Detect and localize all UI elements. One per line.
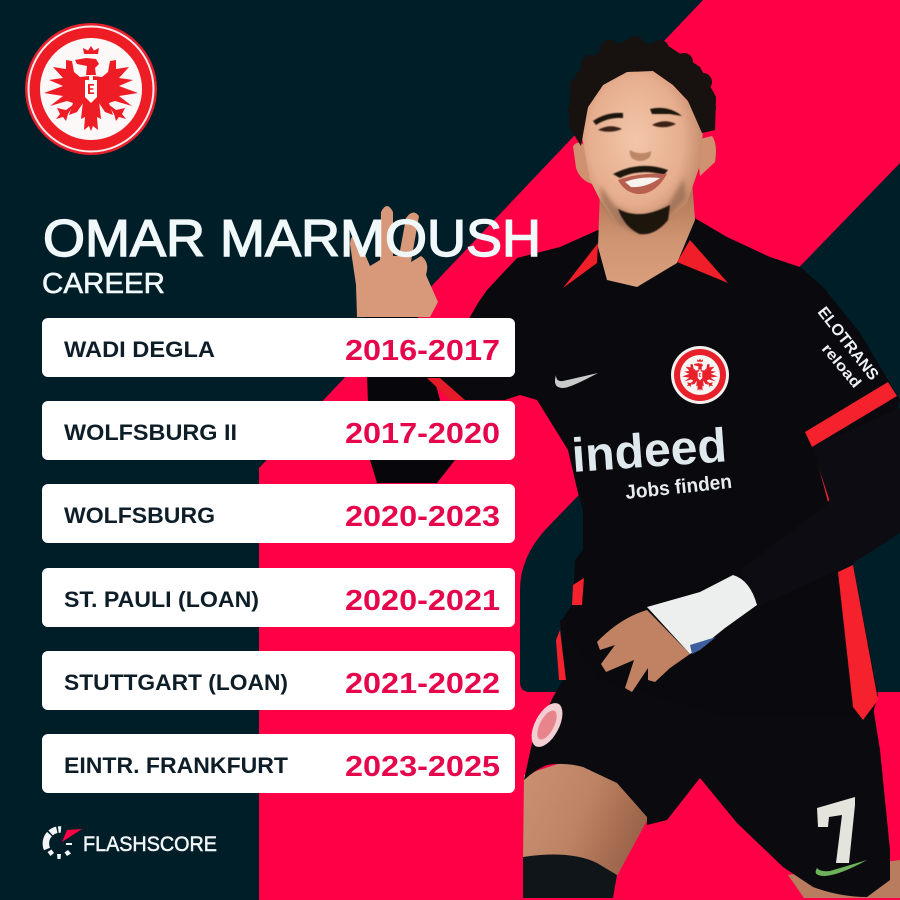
title: OMAR MARMOUSH <box>43 210 541 268</box>
career row: Eintr. Frankfurt <box>42 734 515 793</box>
career row: St. Pauli (loan): ST. PAULI (LOAN) <box>64 587 259 612</box>
shorts crest <box>525 698 569 752</box>
neck <box>598 180 695 287</box>
mouth <box>618 174 667 194</box>
career row: Wadi Degla: WADI DEGLA <box>64 337 215 362</box>
raised hand <box>350 206 438 317</box>
icon: Eintracht Frankfurt crest <box>25 23 157 155</box>
raised forearm sleeve <box>365 317 455 483</box>
teeth <box>625 178 660 187</box>
sleeve sponsor text: reload <box>818 341 864 391</box>
career row: Eintr. Frankfurt: EINTR. FRANKFURT <box>64 753 288 778</box>
sponsor text indeed: indeed <box>570 419 728 483</box>
goatee and moustache <box>613 166 670 234</box>
subtitle: CAREER <box>42 268 165 300</box>
player photo illustration <box>350 36 900 898</box>
hair <box>568 36 716 146</box>
career row: Stuttgart (loan): 2021-2022 <box>345 668 500 700</box>
collar trim <box>563 240 728 288</box>
sleeve red trim <box>427 378 465 400</box>
right forearm <box>740 408 900 607</box>
shorts number 7 <box>817 797 855 863</box>
career row: Stuttgart (loan) <box>42 651 515 710</box>
wrist tape <box>647 575 757 654</box>
career row: Wolfsburg <box>42 484 515 543</box>
jaw stubble <box>600 178 686 234</box>
icon: Flashscore logo mark <box>46 829 82 859</box>
jersey side stripe <box>556 453 878 720</box>
nose shadow <box>630 150 651 161</box>
sock <box>523 855 617 898</box>
right lower leg <box>788 860 900 898</box>
career row: St. Pauli (loan): 2020-2021 <box>345 585 500 617</box>
right sleeve cuff <box>805 382 897 447</box>
left leg <box>523 760 650 876</box>
brand wordmark: FLASHSCORE <box>83 833 217 856</box>
career row: Wolfsburg II <box>42 401 515 460</box>
jersey crest <box>671 346 729 404</box>
nike swoosh <box>555 373 598 388</box>
sleeve sponsor text: ELOTRANS <box>814 304 882 384</box>
eyebrows and eyes <box>593 108 682 132</box>
lower hand <box>597 610 690 692</box>
career row: Wolfsburg: WOLFSBURG <box>64 503 215 528</box>
tape blue edge <box>690 637 716 654</box>
career row: St. Pauli (loan) <box>42 568 515 627</box>
ears <box>573 136 716 184</box>
career row: Wolfsburg II: 2017-2020 <box>345 418 500 450</box>
sponsor text jobs finden: Jobs finden <box>624 471 733 504</box>
red arrow shape <box>259 0 900 900</box>
career row: Wolfsburg II: WOLFSBURG II <box>64 420 237 445</box>
career row: Eintr. Frankfurt: 2023-2025 <box>345 751 500 783</box>
face <box>581 71 703 235</box>
shorts swoosh <box>816 860 867 876</box>
career row: Wadi Degla <box>42 318 515 377</box>
career row: Wadi Degla: 2016-2017 <box>345 335 500 367</box>
career row: Wolfsburg: 2020-2023 <box>345 501 500 533</box>
shorts <box>524 600 890 897</box>
jersey <box>430 217 900 717</box>
career row: Stuttgart (loan): STUTTGART (LOAN) <box>64 670 288 695</box>
